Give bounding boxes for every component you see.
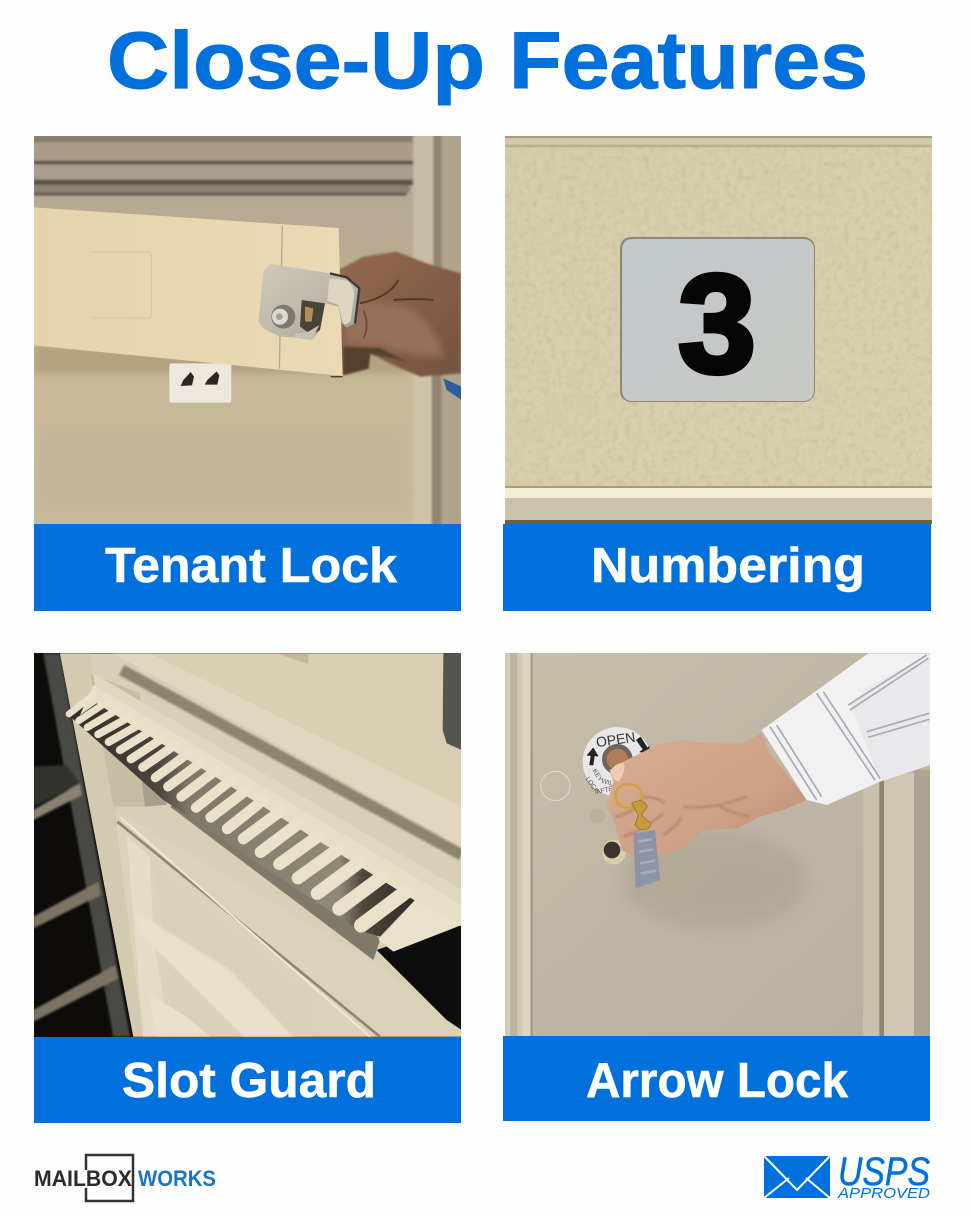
panel: slot guard xyxy=(33,653,462,1123)
white bracket plate xyxy=(169,363,231,403)
panel: arrow lock xyxy=(503,653,931,1121)
open disc: WILL xyxy=(600,778,618,789)
label: numbering xyxy=(503,524,931,611)
slot guard comb xyxy=(68,685,462,952)
photo: slot guard xyxy=(33,653,462,1037)
logo: Mailbox Works: WORKS xyxy=(138,1166,216,1191)
hand xyxy=(607,733,807,857)
open disc: AFTER xyxy=(596,785,619,796)
photo: tenant lock xyxy=(33,135,462,525)
label: numbering: Numbering xyxy=(591,539,865,593)
sticker circle xyxy=(541,771,570,801)
open disc: KEY xyxy=(591,768,604,783)
open disc: OPEN xyxy=(595,729,636,750)
label: arrow lock xyxy=(503,1036,930,1121)
number plate xyxy=(620,237,815,402)
number plate: 3 xyxy=(678,245,756,402)
label: slot guard xyxy=(34,1037,461,1123)
upper lid xyxy=(150,653,444,654)
label: tenant lock: Tenant Lock xyxy=(105,539,398,593)
shelves xyxy=(33,653,130,1037)
panel: numbering xyxy=(503,136,932,611)
cream frame xyxy=(60,653,462,1037)
hand xyxy=(337,252,462,400)
label: arrow lock: Arrow Lock xyxy=(586,1054,849,1108)
door frames xyxy=(505,653,533,1036)
open disc: LOCK xyxy=(584,776,600,795)
lock latch xyxy=(258,264,359,340)
shirt cuff xyxy=(762,653,930,805)
key ring and tag xyxy=(615,784,660,888)
logo: Mailbox Works xyxy=(34,1155,216,1201)
logo: USPS Approved xyxy=(764,1150,930,1202)
logo: Mailbox Works: MAILBOX xyxy=(34,1166,132,1191)
photo: arrow lock xyxy=(505,653,931,1037)
round buttons xyxy=(590,808,626,864)
label: slot guard: Slot Guard xyxy=(122,1054,376,1108)
panel: tenant lock xyxy=(33,135,462,611)
shadow behind comb xyxy=(170,797,380,960)
title: Close-Up Features xyxy=(107,16,868,106)
lower panels xyxy=(115,810,462,1037)
icon: envelope xyxy=(764,1156,830,1198)
open disc xyxy=(583,727,652,796)
logo: USPS Approved: USPS xyxy=(838,1150,930,1194)
door panel xyxy=(33,207,343,376)
label: tenant lock xyxy=(34,524,461,611)
photo: numbering plate xyxy=(505,136,932,524)
logo: USPS Approved: APPROVED xyxy=(837,1185,930,1202)
